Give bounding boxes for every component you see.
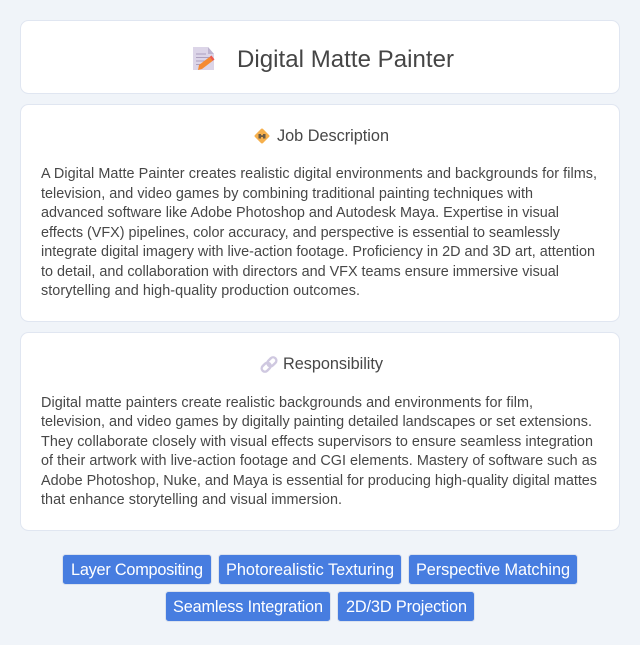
text block: job description: A Digital Matte Painter creates realistic digital environments and backgrounds for films, (41, 166, 597, 182)
text block: responsibility (41, 395, 597, 508)
panel: title card (20, 20, 620, 94)
tag: layer compositing (62, 554, 212, 584)
icon: orange diamond (254, 128, 270, 144)
text block: job description: to detail, and collaboration with directors and VFX teams ensure immersive visual (41, 264, 559, 280)
tag: photorealistic texturing (218, 554, 402, 584)
panel: job description (20, 104, 620, 322)
heading: job description: Job Description (277, 127, 389, 145)
text block: job description: effects (VFX) pipelines, color accuracy, and perspective is essential to seamlessly (41, 225, 561, 241)
tag: layer compositing: Layer Compositing (71, 561, 203, 579)
tag: perspective matching (408, 554, 578, 584)
title: Digital Matte Painter (237, 46, 454, 73)
text block: responsibility: of their artwork with live-action footage and CGI elements. Mastery of software such as (41, 453, 597, 469)
text block: job description: advanced software like Adobe Photoshop and Autodesk Maya. Expertise in visual (41, 205, 559, 221)
panel: responsibility (20, 332, 620, 530)
tag: 2d/3d projection: 2D/3D Projection (346, 598, 467, 616)
text block: responsibility: that enhance storytelling and visual immersion. (41, 492, 342, 508)
text block: responsibility: Adobe Photoshop, Nuke, and Maya is essential for producing high-quality digital mattes (41, 473, 597, 489)
tag: seamless integration (166, 592, 330, 622)
tag: photorealistic texturing: Photorealistic Texturing (226, 561, 394, 579)
skill tags (62, 554, 578, 622)
text block: job description (41, 166, 597, 299)
text block: responsibility: They collaborate closely with visual effects supervisors to ensure seamless integration (41, 434, 593, 450)
tag: seamless integration: Seamless Integration (173, 598, 323, 616)
tag: 2d/3d projection (338, 592, 474, 622)
text block: job description: storytelling and high-quality production outcomes. (41, 283, 360, 299)
text block: responsibility: Digital matte painters create realistic backgrounds and environments for film, (41, 395, 533, 411)
tag: perspective matching: Perspective Matching (416, 561, 570, 579)
text block: responsibility: television, and video games by digitally painting detailed landscapes or set extensions. (41, 414, 592, 430)
icon: document with pencil (193, 47, 214, 70)
icon: chain link (260, 356, 278, 373)
text block: job description: integrate digital imagery with live-action footage. Proficiency in 2D and 3D art, attention (41, 244, 595, 260)
text block: job description: television, and video games by combining traditional painting techniques with (41, 186, 533, 202)
heading: responsibility: Responsibility (283, 355, 384, 373)
